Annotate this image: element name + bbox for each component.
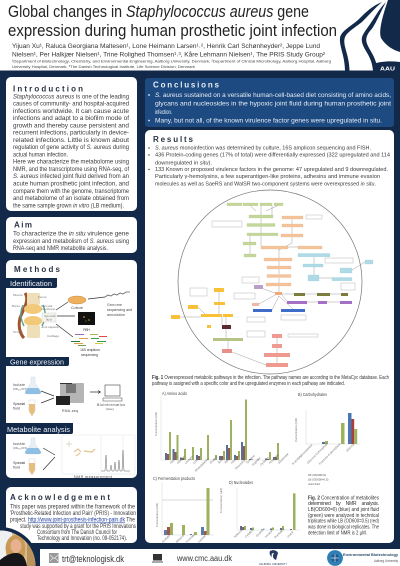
introduction body text: the same sample grown in vitro (LB medium).	[13, 203, 124, 209]
isolate and synovial fluid samples: Isolate	[13, 442, 25, 446]
chart A category labels: Glycine	[176, 455, 186, 465]
icon: university seal logo: AALBORG UNIVERSITY	[259, 562, 287, 566]
illustration: knee joint anatomy: Joint capsule	[41, 325, 59, 329]
chart A category labels: Histidine	[230, 454, 241, 465]
aim body text: expression and metabolism of S. aureus using	[13, 239, 129, 245]
affiliations: University Hospital, Denmark, ³The Danish Technological Institute, Life Science Division, Denmark	[12, 65, 195, 69]
chart A category labels: Glutamate	[277, 452, 290, 465]
introduction body text: infections worldwide. It can cause acute	[13, 109, 130, 115]
results bullet list: 133 Known or proposed virulence factors in the genome: 47 upregulated and 9 downregulated.	[155, 167, 388, 173]
chart A axes: Concentration (mM)	[154, 412, 158, 436]
chart A category labels: Threonine	[234, 458, 246, 471]
introduction body text: causes of community- and hospital-acquired	[13, 102, 129, 108]
synovial fluid label and tube: Synovial	[13, 402, 25, 406]
chart: NMR spectrum: NMR measurement	[74, 475, 112, 479]
authors: Yijuan Xu¹, Raluca Georgiana Maltesen¹, Lone Heimann Larsen¹˒², Henrik Carl Schønheyder², Jeppe Lund	[12, 43, 320, 50]
chart A: amino acids	[154, 391, 290, 473]
illustration: knee joint anatomy: Cartilage	[47, 334, 59, 338]
results bullet list: 436 Protein-coding genes (17% of total) were differentially expressed (322 upregulated and 114	[155, 153, 390, 159]
chart C title: C) Fermentation products	[153, 476, 196, 481]
tag: metabolite analysis: Metabolite analysis	[7, 425, 70, 434]
panel: conclusions	[145, 78, 394, 127]
panel: results	[145, 130, 394, 544]
pathway: yellow boxes	[171, 288, 233, 328]
figure 2 caption: triplicates while LB (OD600=0.5) (red)	[308, 519, 379, 525]
figure 2 caption: (green) were analyzed in technical	[308, 513, 379, 519]
acknowledgement body text: study was supported by a grant for the PRIS Innovations	[20, 524, 136, 530]
chart C category labels: Lactate	[197, 534, 207, 544]
icon: university seal logo	[259, 550, 287, 566]
figure 2 caption: detection limit of NMR is 2 µM.	[308, 530, 367, 536]
figure 1: metabolic pathway circle	[171, 190, 373, 374]
chart B bars	[322, 413, 357, 444]
heading: conclusions: Conclusions	[153, 80, 220, 90]
chart D title: D) Nucleosides	[229, 480, 254, 485]
authors	[12, 43, 325, 58]
chart D category labels: Inosine	[264, 529, 274, 539]
chart A category labels: Phenylalanine	[194, 456, 210, 473]
title: Global changes in Staphylococcus aureus gene	[8, 2, 309, 21]
results bullet list	[148, 146, 390, 187]
affiliations	[12, 60, 331, 69]
synovial fluid label and tube: fluid	[13, 406, 20, 410]
aim body text: To characterize the in situ virulence gene	[13, 232, 130, 238]
introduction body text: NMR, and the transcriptome using RNA-seq, of	[13, 167, 129, 173]
chart A category labels: Aspartate	[268, 453, 280, 465]
synovial fluid label and tube	[13, 400, 35, 416]
aim body text	[13, 232, 130, 252]
icon: bioinformatics computer	[97, 385, 125, 411]
heading: results: Results	[153, 135, 194, 144]
title: expression during human prosthetic joint infection	[8, 21, 337, 40]
header band	[0, 0, 400, 72]
pathway: light blue boxes	[298, 254, 373, 281]
icon: environmental biotechnology logo: Aalborg University	[374, 559, 398, 563]
chart C axes: Concentration (mM)	[155, 503, 159, 527]
introduction body text: S. aureus infected joint fluid derived from an	[13, 174, 129, 180]
acknowledgement body text: This paper was prepared within the framework of the	[10, 505, 136, 511]
chart D category labels: Guanine	[255, 527, 266, 538]
chart D: nucleosides	[219, 480, 300, 540]
chart C bars	[164, 488, 210, 535]
FISH microscopy image: FISH	[83, 328, 90, 332]
results bullet list: downregulated in situ).	[155, 161, 212, 167]
acknowledgement body text: Consortium from The Danish Council for	[37, 530, 117, 536]
chart A blue bars: LB OD 0	[165, 442, 275, 460]
panel: introduction	[6, 77, 137, 211]
figure 2 caption: determined by NMR analysis.	[308, 501, 379, 507]
chart B category labels: N-acetylglucosamine	[291, 443, 314, 466]
isolate and synovial fluid samples: (OD₆₀₀=0.5)	[13, 446, 27, 450]
label: synovial fluid	[42, 313, 56, 322]
figure 1 caption	[152, 375, 389, 387]
introduction body text: compare them with the genome, transcriptome	[13, 189, 130, 195]
chart B axes: Concentration (mM)	[294, 418, 298, 442]
pathway: olive boxes	[294, 293, 348, 296]
icon: environmental biotechnology logo: Environmental Biotechnology	[343, 552, 399, 557]
icon: email	[49, 553, 58, 563]
chart B category labels: Glucose	[345, 442, 356, 453]
introduction body text: Here we characterize the metabolome using	[13, 160, 129, 166]
conclusions bullet list: glycans and nucleosides in the hypoxic joint fluid during human prosthetic joint	[155, 101, 391, 108]
panel: methods	[6, 260, 137, 479]
chart A category labels: Tyrosine	[245, 454, 256, 465]
affiliations: ¹Department of Biotechnology, Chemistry, and Environmental Engineering, Aalborg University, Denmark, ²Department of Clinical Microbiology, Aalborg Hospital, Aalborg	[12, 60, 331, 64]
chart C category labels: Acetate	[161, 533, 171, 544]
website: www.cmc.aau.dk	[176, 554, 233, 563]
icon: environmental biotechnology logo	[327, 550, 399, 566]
arrows to sequencer	[41, 391, 54, 403]
isolate and synovial fluid samples: fluid	[13, 466, 20, 470]
panel: acknowledgement	[6, 487, 137, 543]
chart A category labels: Arginine	[251, 456, 262, 467]
chart A green bars: joint fluid	[169, 400, 279, 460]
chart A category labels: Valine	[223, 456, 232, 465]
16S amplicon sequencing	[71, 334, 107, 357]
conclusions bullet list: Many, but not all, of the known virulence factor genes were upregulated in situ.	[155, 118, 382, 125]
icon: bioinformatics computer: Bioinformatics	[97, 403, 125, 407]
16S amplicon sequencing: 16S amplicon	[80, 348, 100, 352]
chart C: fermentation products	[153, 476, 214, 544]
illustration: knee joint anatomy: Bursa	[12, 304, 20, 308]
contact email: trt@teknologisk.dk	[62, 554, 124, 564]
pathway: purple boxes	[254, 285, 352, 304]
icon: computer	[152, 554, 163, 563]
chart legend: Joint fluid	[308, 482, 320, 486]
genome sequence annotation: Genome	[107, 303, 122, 307]
illustration: knee joint anatomy: Muscle	[13, 293, 23, 297]
icon: culture dish: Culture	[71, 306, 83, 310]
panel: aim	[6, 217, 137, 253]
chart A category labels	[169, 452, 290, 473]
heading: introduction: Introduction	[13, 84, 83, 94]
pathway: green boxes	[227, 203, 283, 257]
chart A category labels: Serine	[217, 456, 226, 465]
heading: acknowledgement: Acknowledgement	[10, 493, 110, 502]
chart D category labels	[233, 526, 294, 540]
icon: RNA-seq sequencer	[56, 383, 84, 413]
isolate and synovial fluid samples	[13, 438, 41, 475]
acknowledgement body text: 'Prosthetic-Related Infection and Pain' (PRIS) - Innovation	[10, 511, 136, 517]
figure 1 caption: pathway is assigned with a specific color and the upregulated enzymes in each pathway are indicated.	[152, 381, 345, 387]
heading: aim: Aim	[14, 221, 32, 230]
icon: AAU logo	[340, 0, 400, 72]
chart D category labels: Adenosine	[233, 526, 246, 539]
chart D bars	[240, 493, 296, 530]
acknowledgement body text: Technology and Innovation (no. 09-052174).	[37, 536, 127, 542]
chart B category labels: Glucose-6-phosphate	[306, 441, 329, 465]
acknowledgement body text	[10, 505, 136, 542]
introduction body text: infections and adapt to a biofilm mode of	[13, 116, 129, 122]
introduction body text: actual human infection.	[13, 152, 68, 158]
figure 2 caption: Fig. 2 Concentration of metabolites	[308, 495, 379, 501]
chart A category labels: Lysine	[192, 456, 201, 465]
results bullet list: S. aureus monoinfection was determined by culture, 16S amplicon sequencing and FISH.	[155, 146, 371, 152]
conclusions bullet list: S. aureus sustained on a versatile human-cell-based diet consisting of amino acids,	[155, 92, 391, 99]
chart D category labels: Uracil	[286, 530, 294, 539]
figure 2 caption: was done in biological replicates. The	[308, 524, 379, 530]
portrait photo	[0, 528, 36, 566]
label: synovial fluid: Synovial	[44, 314, 56, 318]
chart C category labels: Formate	[185, 533, 196, 544]
chart: NMR spectrum	[62, 435, 135, 479]
aim body text: RNA-seq and NMR metabolite analysis.	[13, 246, 108, 252]
isolate and synovial fluid samples: Synovial	[13, 461, 25, 465]
introduction body text: regulation of gene activity of S. aureus during	[13, 145, 129, 151]
chart A title: A) Amino acids	[162, 391, 188, 396]
introduction body text: recurrent infections, particularly in device-	[13, 131, 129, 137]
authors: Nielsen¹, Per Halkjær Nielsen¹, Trine Rolighed Thomsen¹˒³, Kåre Lehmann Nielsen¹, The PRIS Study Group²	[12, 50, 325, 58]
isolate label and flask: Isolate	[13, 383, 25, 387]
genome sequence annotation: sequencing and	[107, 308, 132, 312]
chart legend	[308, 473, 329, 486]
pathway: enzyme annotation boxes	[190, 215, 355, 337]
FISH microscopy image	[78, 312, 95, 332]
introduction body text: growth and thereby cause persistent and	[13, 123, 129, 129]
chart A red bars: LB OD 0.5	[167, 446, 277, 460]
pathway: orange boxes	[261, 216, 322, 286]
chart C category labels	[161, 533, 207, 544]
icon: bioinformatics computer: (Glue)	[106, 407, 114, 411]
genome sequence annotation	[105, 292, 132, 317]
chart B category labels: Fructose-6-phosphate	[318, 442, 342, 466]
conclusions bullet list: infection.	[155, 109, 172, 116]
illustration: knee joint anatomy: Synovial	[41, 304, 53, 308]
pathway: lower boxes	[213, 325, 290, 367]
pathway connectors	[180, 206, 365, 365]
chart B title: B) Carbohydrates	[298, 392, 328, 397]
introduction body text	[13, 94, 130, 209]
illustration: knee joint anatomy	[12, 293, 59, 338]
title	[8, 2, 337, 40]
introduction body text: acute human prosthetic joint infection, and	[13, 182, 129, 188]
genome sequence annotation: annotation	[107, 313, 125, 317]
chart B: carbohydrates	[291, 392, 360, 466]
conclusions bullet list	[148, 92, 391, 125]
chart D category labels: Thymidine	[273, 527, 286, 540]
chart D axes: Concentration (µM)	[219, 488, 223, 513]
chart legend: LB (OD600=0)	[308, 473, 326, 477]
heading: methods: Methods	[14, 265, 61, 274]
introduction body text: Staphylococcus aureus is one of the leading	[13, 94, 129, 100]
chart C category labels: Ethanol	[175, 533, 185, 544]
results bullet list: Particularly γ-hemolysins, a few superantigen-like proteins, adhesins and immune evasion	[155, 174, 380, 180]
chart A category labels: Proline	[209, 455, 219, 465]
chart D category labels: Cytidine	[244, 528, 255, 539]
isolate label and flask	[13, 377, 41, 394]
chart A category labels: Cysteine	[259, 455, 270, 467]
arrow to bioinformatics	[90, 390, 100, 394]
illustration: knee joint anatomy: membrane	[41, 307, 56, 311]
16S amplicon sequencing: sequencing	[81, 353, 98, 357]
tag: identification: Identification	[10, 279, 52, 288]
arrows to NMR	[43, 448, 55, 470]
chart A category labels: Leucine	[184, 454, 194, 465]
logo wordmark: AAU	[380, 66, 395, 72]
figure 2 caption: LB(OD600=0) (blue) and joint fluid	[308, 507, 379, 513]
tag: gene expression: Gene expression	[10, 358, 64, 366]
arrows: sample to analyses	[56, 297, 105, 337]
icon: RNA-seq sequencer: RNA-seq	[62, 409, 78, 413]
introduction body text: and metabolome of an isolate obtained from	[13, 196, 129, 202]
illustration: knee joint anatomy: Femur	[38, 295, 47, 299]
illustration: knee joint anatomy: Tendon	[13, 330, 23, 334]
icon: culture dish	[68, 296, 86, 310]
isolate label and flask: (OD₆₀₀=0.5)	[13, 387, 27, 391]
figure 2 caption	[308, 495, 379, 536]
results bullet list: molecules as well as SaeRS and WalSR two-component systems were overexpressed in situ.	[155, 181, 376, 187]
chart legend: LB (OD600=0.5)	[308, 478, 329, 482]
chart B category labels	[291, 441, 356, 466]
chart A category labels: Alanine	[169, 455, 179, 465]
label: synovial fluid: fluid	[46, 318, 52, 322]
acknowledgement body text: project. http://www.joint-prosthesis-infection-pain.dk The	[10, 518, 136, 524]
introduction body text: related infections. Little is known about	[13, 138, 129, 144]
footer	[40, 549, 400, 566]
pathway: central and blue boxes	[252, 292, 305, 312]
